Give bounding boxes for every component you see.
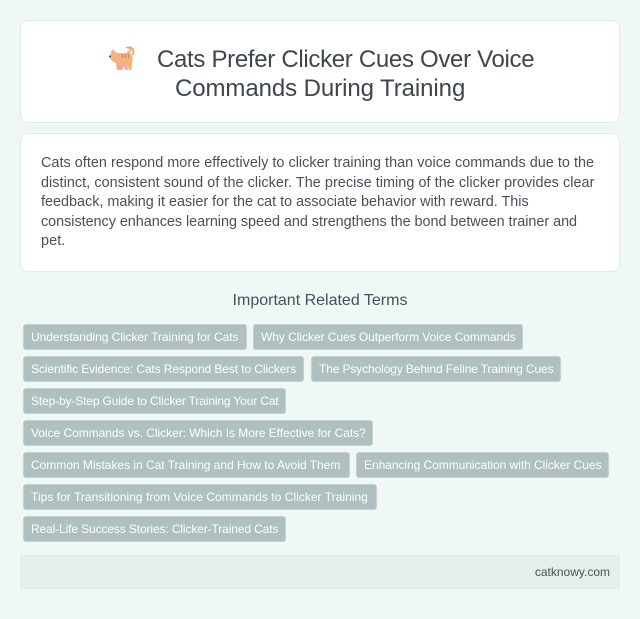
footer: catknowy.com (535, 565, 610, 579)
tag (23, 452, 350, 478)
tag (253, 324, 523, 350)
text block: description: feedback, making it easier for the cat to associate behavior with reward. This (41, 194, 529, 210)
icon: cat (109, 46, 134, 70)
text block: description: consistency enhances learning speed and strengthens the bond between trainer and (41, 214, 577, 230)
tag: Enhancing Communication with Clicker Cues (364, 458, 601, 472)
footer (20, 555, 620, 589)
tag: Step-by-Step Guide to Clicker Training Your Cat (31, 394, 279, 408)
tag (23, 356, 304, 382)
tag (23, 420, 373, 446)
tag (23, 324, 247, 350)
text block: description: distinct, consistent sound of the clicker. The precise timing of the clicker provides clear (41, 174, 594, 190)
tag: Common Mistakes in Cat Training and How to Avoid Them (31, 458, 340, 472)
tag: Why Clicker Cues Outperform Voice Commands (261, 330, 516, 344)
title (157, 46, 534, 102)
tag (23, 516, 286, 542)
text block: description (41, 155, 594, 249)
tag (23, 388, 286, 414)
tag list (23, 324, 609, 542)
tag: Real-Life Success Stories: Clicker-Trained Cats (31, 522, 278, 536)
tag (311, 356, 561, 382)
text block: description: pet. (41, 233, 65, 249)
panel: description card (20, 133, 620, 272)
tag: The Psychology Behind Feline Training Cues (319, 362, 553, 376)
tag (356, 452, 609, 478)
tag: Tips for Transitioning from Voice Commands to Clicker Training (31, 490, 368, 504)
heading: important related terms: Important Related Terms (233, 292, 407, 309)
title: Commands During Training (175, 75, 465, 102)
text block: description: Cats often respond more effectively to clicker training than voice commands due to the (41, 155, 594, 171)
tag: Scientific Evidence: Cats Respond Best to Clickers (31, 362, 296, 376)
tag: Voice Commands vs. Clicker: Which Is More Effective for Cats? (31, 426, 366, 440)
tag: Understanding Clicker Training for Cats (31, 330, 238, 344)
tag (23, 484, 377, 510)
panel: title card (20, 20, 620, 123)
title: Cats Prefer Clicker Cues Over Voice (157, 46, 534, 73)
